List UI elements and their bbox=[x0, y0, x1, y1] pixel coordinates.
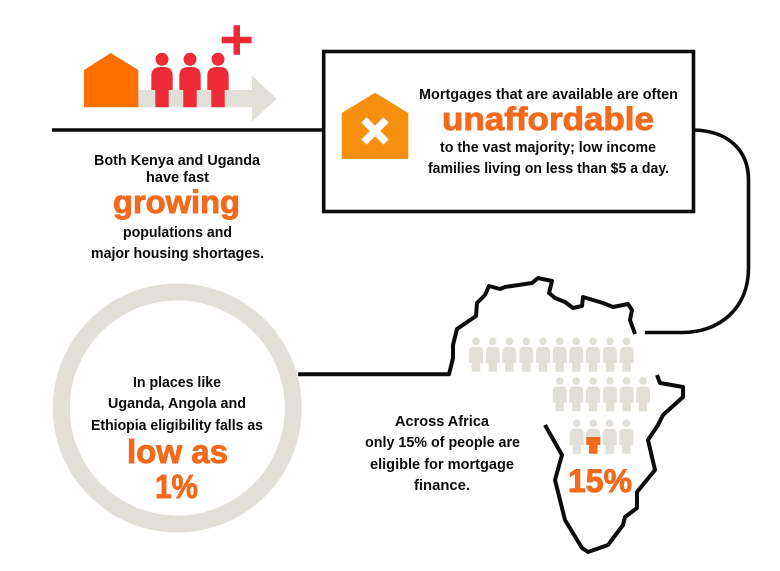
text block: growing populations bbox=[91, 153, 264, 262]
stat: 15%: 15% bbox=[568, 463, 632, 499]
text block: across Africa: eligible for mortgage bbox=[370, 457, 514, 473]
connector line: box to Africa bbox=[645, 130, 748, 332]
icon: red plus bbox=[222, 25, 252, 55]
heading: growing: growing bbox=[113, 184, 240, 220]
panel: eligibility ring bbox=[61, 292, 293, 524]
panel: unaffordable mortgages: families living on less than $5 a day. bbox=[428, 161, 669, 177]
icon: orange house bbox=[84, 53, 138, 107]
text block: across Africa: Across Africa bbox=[395, 414, 490, 430]
text block: across Africa: only 15% of people are bbox=[365, 435, 520, 451]
panel border bbox=[324, 52, 694, 212]
panel: eligibility ring: Ethiopia eligibility falls as bbox=[91, 418, 263, 434]
panel: unaffordable mortgages: Mortgages that are available are often bbox=[419, 87, 678, 103]
text block: across Africa bbox=[365, 414, 520, 494]
icon: growing population and housing bbox=[84, 25, 277, 122]
heading: low as 1%: low as bbox=[127, 433, 228, 470]
panel: eligibility ring: In places like bbox=[133, 375, 221, 391]
icon: grey growth arrow bbox=[138, 76, 277, 122]
text block: growing populations: populations and bbox=[123, 225, 232, 241]
text block: growing populations: major housing shortages. bbox=[91, 246, 264, 262]
text block: across Africa: finance. bbox=[414, 478, 470, 494]
panel: unaffordable mortgages: to the vast majority; low income bbox=[440, 140, 656, 156]
ring bbox=[61, 292, 293, 524]
text block: growing populations: have fast bbox=[146, 170, 209, 186]
map: Africa outline bbox=[298, 278, 683, 552]
heading: low as 1%: 1% bbox=[155, 468, 198, 505]
panel: eligibility ring: Uganda, Angola and bbox=[108, 396, 246, 412]
heading: low as 1% bbox=[127, 433, 228, 505]
heading: unaffordable: unaffordable bbox=[442, 101, 654, 137]
text block: growing populations: Both Kenya and Uganda bbox=[94, 153, 261, 169]
icon: house with cross bbox=[342, 93, 408, 159]
icon: three red people bbox=[151, 53, 229, 107]
connector line: top left to box bbox=[52, 128, 323, 132]
chart: people pictogram bbox=[469, 338, 650, 454]
panel: unaffordable mortgages bbox=[324, 52, 694, 212]
